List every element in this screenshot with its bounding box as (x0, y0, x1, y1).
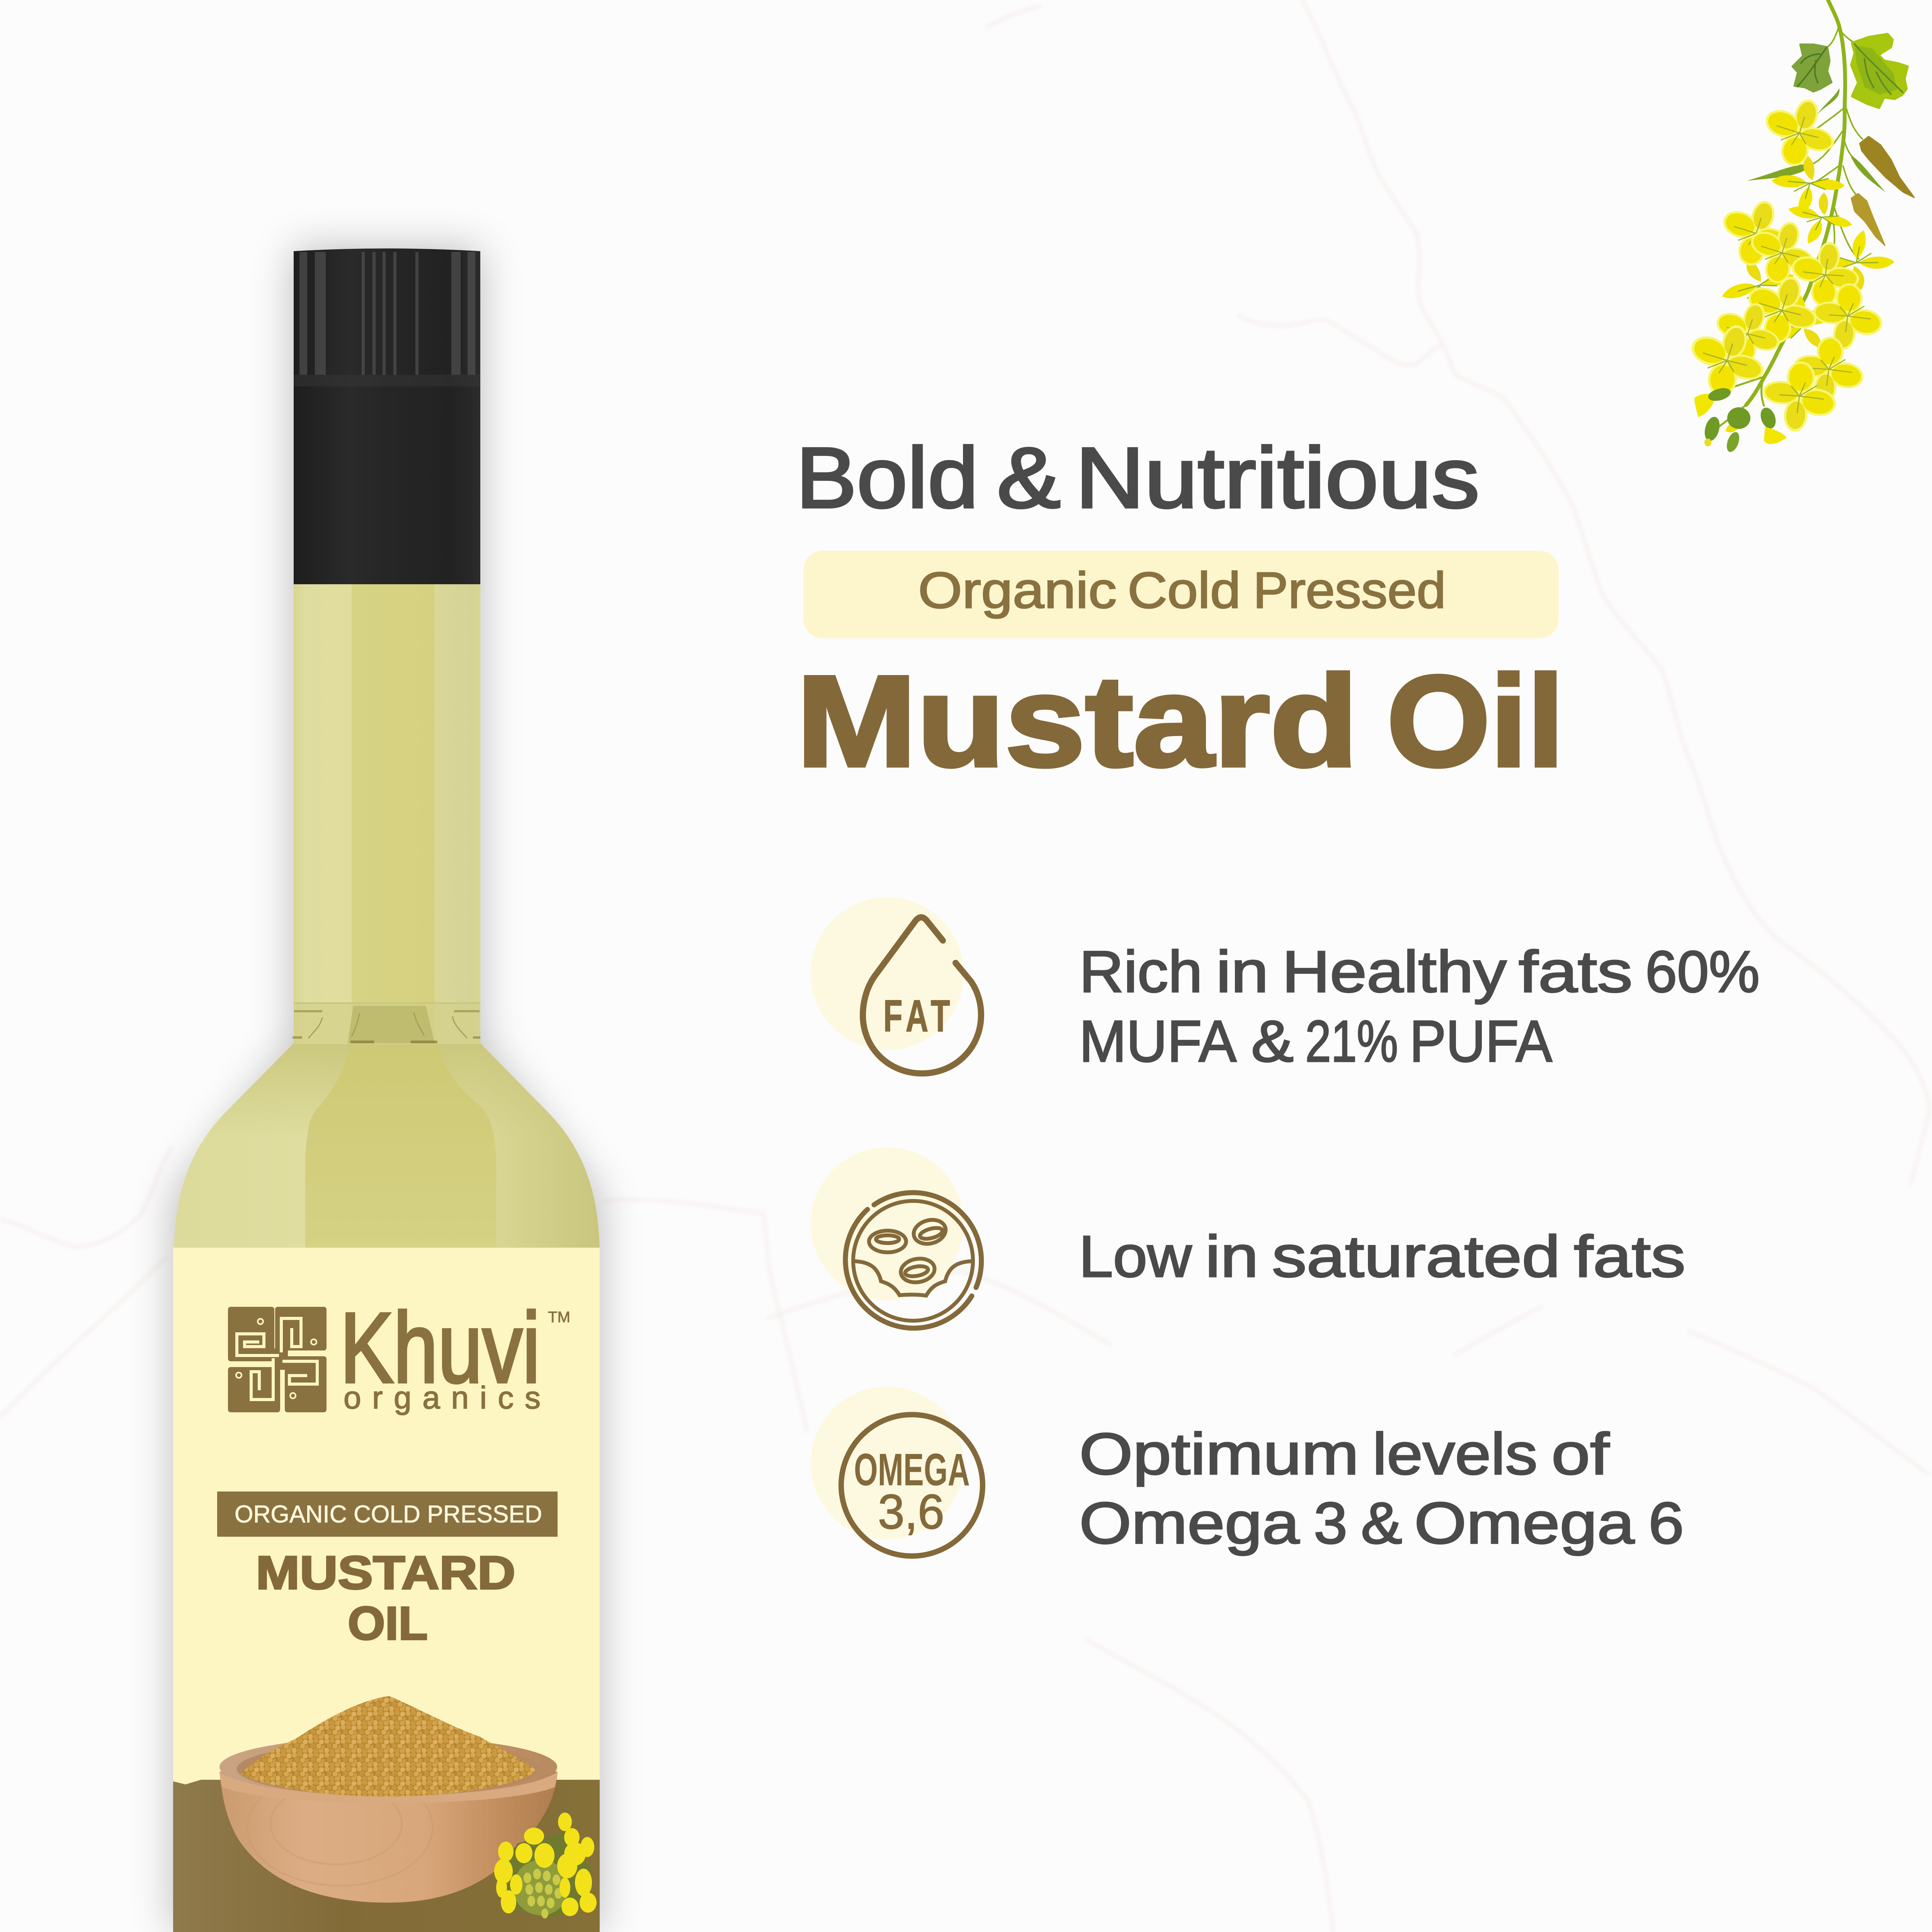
text: rich in healthy fats: 21% (1305, 1009, 1398, 1074)
heading: Mustard Oil: Mustard (796, 649, 1358, 793)
icon: omega 3,6 badge: 3,6 (878, 1485, 944, 1539)
text: low in saturated fats: in (1205, 1224, 1259, 1289)
text: optimum levels of omega: Optimum (1079, 1421, 1359, 1487)
text: low in saturated fats (1079, 1224, 1685, 1289)
subtitle pill: Organic Cold Pressed (803, 551, 1559, 638)
label tag: organic cold pressed (217, 1492, 558, 1537)
text: rich in healthy fats: & (1251, 1009, 1294, 1074)
text: optimum levels of omega: Omega (1079, 1490, 1300, 1556)
icon: omega 3,6 badge: OMEGA (854, 1444, 970, 1495)
title: Bold & Nutritious: Bold (796, 430, 978, 526)
icon: mustard flower sprig (1687, 0, 1914, 454)
title: Bold & Nutritious: & (997, 430, 1061, 526)
logo text: Khuvi organics: organics (344, 1380, 541, 1415)
bottle label (173, 1248, 600, 1932)
logo text: Khuvi organics: TM (548, 1309, 570, 1326)
text: rich in healthy fats: fats (1519, 939, 1633, 1005)
label product name: OIL (348, 1597, 428, 1650)
text: rich in healthy fats: 60% (1645, 939, 1760, 1005)
text: optimum levels of omega: 6 (1648, 1490, 1684, 1556)
text: rich in healthy fats: Rich (1079, 939, 1202, 1005)
label tag: organic cold pressed: ORGANIC COLD PRESSED (235, 1501, 542, 1528)
text: optimum levels of omega: & (1361, 1490, 1402, 1556)
subtitle pill: Organic Cold Pressed: Cold (1128, 562, 1241, 619)
text: low in saturated fats: fats (1574, 1224, 1685, 1289)
benefit: omega (811, 1386, 1684, 1556)
text: rich in healthy fats: MUFA (1079, 1009, 1237, 1074)
text: rich in healthy fats (1079, 939, 1760, 1074)
text: low in saturated fats: Low (1079, 1224, 1192, 1289)
text: optimum levels of omega: Omega (1414, 1490, 1635, 1556)
heading: Mustard Oil: Oil (1387, 649, 1564, 793)
bottle body (174, 1043, 600, 1932)
seed pods (1747, 88, 1914, 245)
benefit: healthy fats (811, 897, 1760, 1074)
title: Bold & Nutritious: Nutritious (1075, 430, 1480, 526)
text: rich in healthy fats: Healthy (1282, 939, 1507, 1005)
icon: fat drop: FAT (883, 991, 955, 1041)
subtitle pill: Organic Cold Pressed: Organic (918, 562, 1117, 619)
bottle cap (294, 248, 480, 584)
text: optimum levels of omega (1079, 1421, 1684, 1556)
brown band (173, 1780, 600, 1932)
label product name (256, 1546, 515, 1650)
icon: fat drop (811, 897, 981, 1073)
benefit: low saturated fats (811, 1147, 1685, 1328)
text: rich in healthy fats: PUFA (1410, 1009, 1553, 1074)
product: mustard oil bottle (173, 248, 600, 1932)
bottle neck (293, 584, 480, 1044)
bottle shadow (174, 249, 600, 1932)
subtitle pill: Organic Cold Pressed: Pressed (1253, 562, 1446, 619)
title: Bold & Nutritious (796, 430, 1480, 526)
text: optimum levels of omega: of (1551, 1421, 1610, 1487)
text: low in saturated fats: saturated (1272, 1224, 1560, 1289)
buds (1694, 386, 1787, 454)
text: optimum levels of omega: levels (1372, 1421, 1537, 1487)
bowl of mustard seeds (219, 1696, 558, 1903)
text: optimum levels of omega: 3 (1314, 1490, 1347, 1556)
flowers (1687, 97, 1897, 439)
mustard flowers on label (494, 1813, 597, 1918)
leaves (1793, 34, 1908, 108)
icon: omega 3,6 badge (811, 1386, 983, 1556)
label product name: MUSTARD (256, 1546, 515, 1599)
icon: seeds in bowl (811, 1147, 981, 1328)
logo text: Khuvi organics: Khuvi (340, 1292, 540, 1403)
sprig stems (1716, 0, 1862, 429)
logo mark (228, 1307, 327, 1412)
text: rich in healthy fats: in (1216, 939, 1269, 1005)
heading: Mustard Oil (796, 649, 1564, 793)
